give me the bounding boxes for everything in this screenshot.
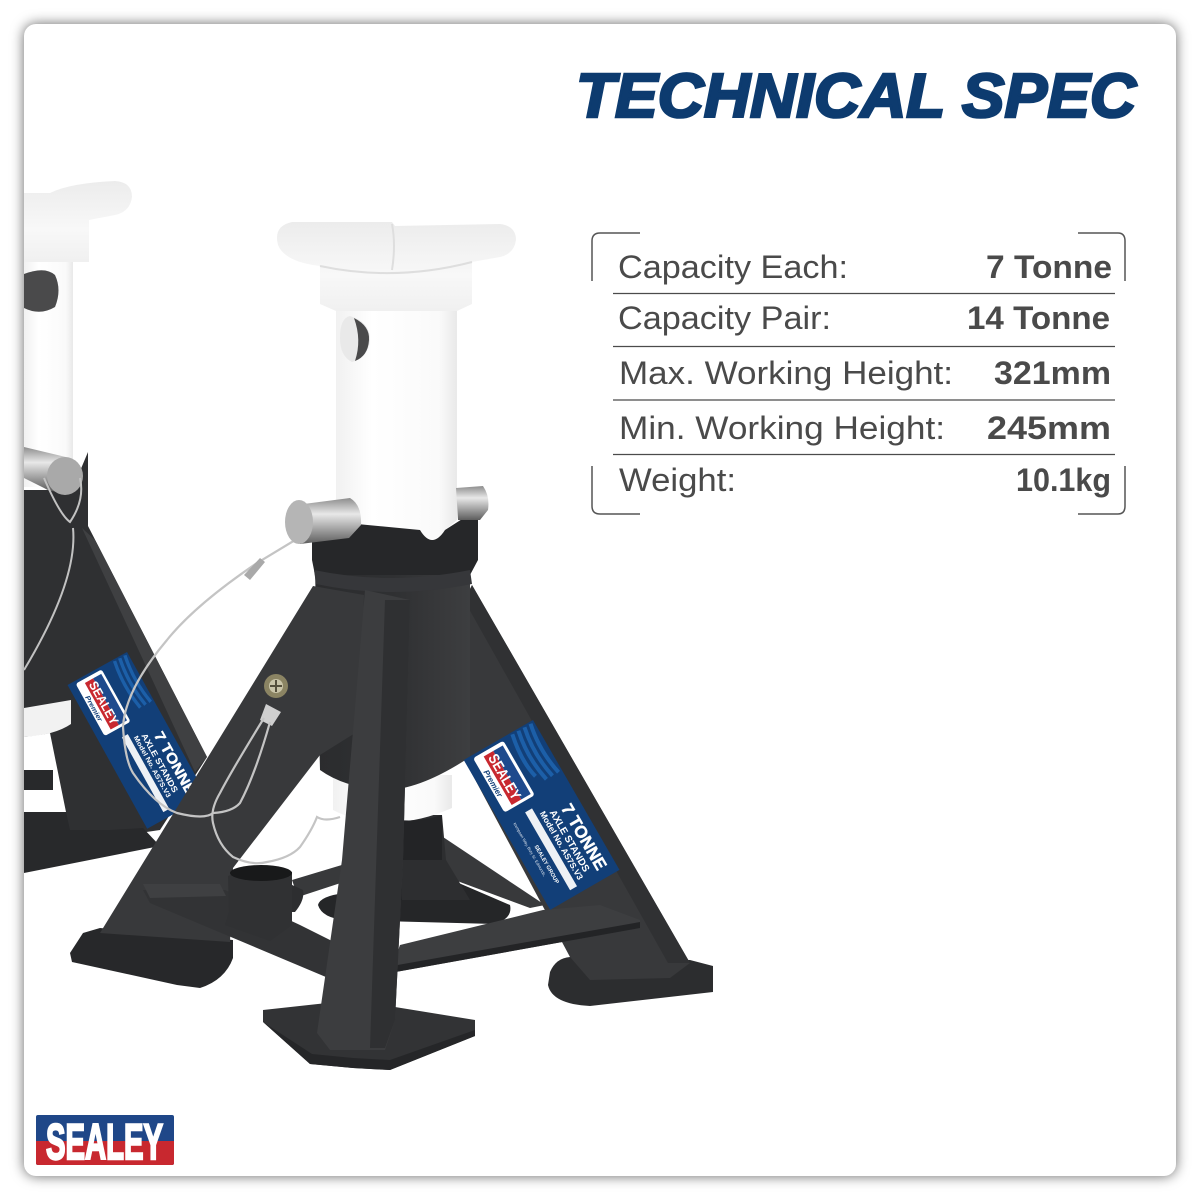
right cross bar [398, 910, 562, 972]
right foot [548, 957, 713, 1006]
row: capacity pair: 14 Tonne [967, 300, 1110, 336]
tube hole dark interior [354, 318, 369, 361]
saddle of left stand [24, 181, 132, 262]
left stand blue label: SEALEY [86, 679, 121, 727]
wire ferrule [244, 558, 265, 580]
saddle and collar [277, 222, 516, 311]
row: min working height: Min. Working Height: [619, 410, 945, 446]
left stand blue label [68, 652, 207, 829]
wire clamp [260, 704, 281, 726]
black main body [315, 570, 470, 790]
row: capacity pair [618, 300, 1110, 336]
Sealey logo: SEALEY [46, 1114, 163, 1170]
left stand locking pin [24, 447, 67, 492]
cup opening [230, 865, 292, 881]
label logo [473, 741, 535, 813]
left cross bar [230, 921, 330, 977]
saddle groove [320, 224, 472, 273]
label logo: SEALEY [484, 751, 524, 803]
main stand blue label [464, 720, 620, 910]
left foot [70, 928, 233, 988]
left pin end [47, 457, 83, 495]
gap under left stand collar [24, 733, 66, 812]
row: capacity each: Capacity Each: [618, 249, 848, 285]
label text: company: SEALEY GROUP [533, 844, 560, 885]
lower cross bar of left stand [24, 770, 160, 873]
label text: axle stands: AXLE STANDS [547, 808, 591, 874]
left stand blue label: AXLE STANDS [140, 732, 180, 794]
front locking pin [285, 498, 361, 544]
right cross bar lower edge [390, 922, 640, 973]
label text: address: Kempson Way, Bury St. Edmunds, [512, 822, 547, 877]
hole in left tube [24, 270, 58, 312]
white lower collar [333, 775, 452, 822]
left stand wire [24, 478, 81, 670]
right pin [456, 486, 488, 520]
left stand blue label: Premier [83, 694, 105, 724]
row: weight: Weight: [619, 462, 736, 498]
row: max working height [619, 355, 1111, 391]
label wave stripes [510, 724, 559, 784]
right leg edge shade [464, 585, 690, 963]
table corner brackets [592, 233, 1125, 514]
crown highlight [314, 570, 472, 592]
row: min working height [619, 410, 1111, 446]
left stand blue label: Model No. AS7S.V3 [132, 734, 173, 799]
label background [464, 720, 620, 910]
label text: model: Model No. AS7S.V3 [538, 809, 585, 882]
front foot [263, 1003, 475, 1070]
left leg [100, 586, 364, 942]
Sealey logo [36, 1114, 174, 1170]
front leg [317, 590, 410, 1050]
title: TECHNICAL SPEC [576, 62, 1137, 131]
row: max working height: Max. Working Height: [619, 355, 953, 391]
label serial bar [525, 808, 577, 890]
left stand blue label: 7 TONNE [150, 729, 198, 798]
row: capacity each [618, 249, 1112, 285]
row: max working height: 321mm [994, 355, 1111, 391]
mounting bolt [264, 674, 288, 698]
right leg highlight of left stand [82, 528, 207, 772]
front leg facet [370, 600, 410, 1048]
back leg post [402, 815, 460, 884]
back cross rail [292, 865, 342, 896]
row: capacity each: 7 Tonne [986, 249, 1112, 285]
lower post [400, 815, 442, 860]
right leg [470, 585, 690, 980]
specification table [592, 233, 1125, 514]
row: capacity pair: Capacity Pair: [618, 300, 831, 336]
left axle stand (partly cropped) [24, 181, 207, 873]
black body and legs of left stand [24, 452, 207, 850]
white sleeve tube [336, 305, 457, 539]
tube hole [340, 316, 370, 362]
main axle stand [70, 222, 713, 1070]
small back foot tip beside cup [292, 885, 304, 912]
row: weight: 10.1kg [1016, 462, 1111, 498]
row: min working height: 245mm [987, 410, 1111, 446]
white collar of left stand [24, 700, 71, 737]
label logo: Premier [482, 768, 505, 799]
black crown head [312, 514, 478, 575]
row: weight [619, 462, 1111, 498]
label text: 7 tonne: 7 TONNE [557, 800, 610, 873]
lanyard wire [123, 525, 340, 863]
left cross bar rib [146, 890, 226, 898]
table row dividers [613, 294, 1115, 454]
back plate [444, 838, 542, 908]
foot front lip shade [263, 1022, 475, 1070]
white tube of left stand [24, 262, 73, 487]
cup socket [225, 868, 292, 941]
back foot [318, 884, 510, 924]
